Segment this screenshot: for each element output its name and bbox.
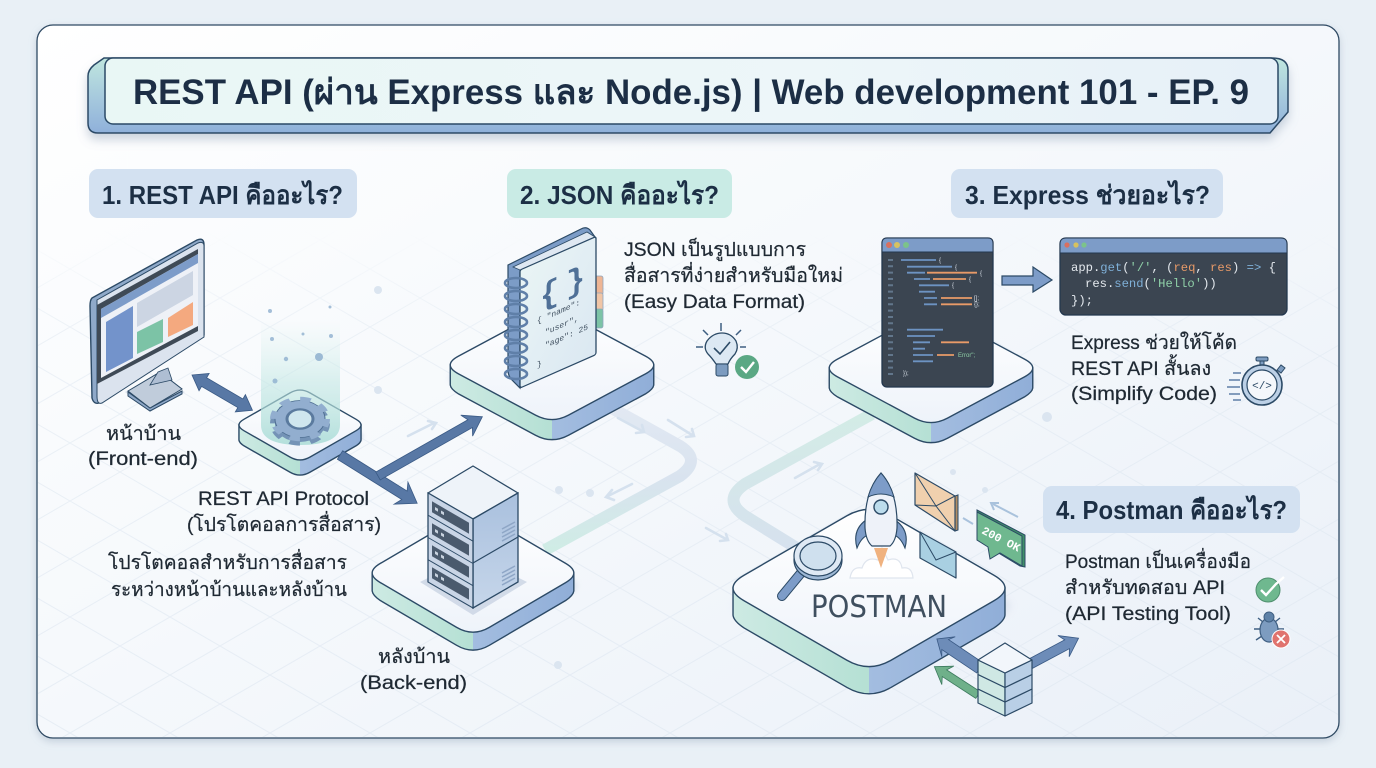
text: JSON description: (Easy Data Format) (624, 291, 805, 313)
title banner (88, 58, 1288, 133)
label: front-end (88, 423, 198, 470)
icon: JSON notebook: } (566, 261, 585, 305)
icon: server rack (420, 466, 527, 615)
arrow: protocol to back-end (333, 444, 424, 514)
heading: 3 Express: 3. Express ช่วยอะไร? (965, 179, 1210, 210)
text: Postman description: (API Testing Tool) (1065, 603, 1231, 625)
platform: JSON (450, 310, 654, 440)
code window: long code: { (969, 277, 971, 283)
icon: 200 OK speech bubble: 200 OK (979, 525, 1022, 555)
icon: bug with red x (1254, 612, 1290, 648)
label: REST API protocol (187, 488, 381, 536)
text: Postman description: Postman เป็นเครื่องมือ (1065, 548, 1251, 573)
arrow: front-end to protocol (187, 366, 257, 419)
text: Postman description (1065, 548, 1251, 625)
icon: JSON notebook: { (540, 273, 559, 318)
platform: gear (239, 390, 363, 475)
text: Express description: REST API สั้นลง (1071, 354, 1211, 380)
heading: 2 JSON: 2. JSON คืออะไร? (520, 179, 719, 210)
code window: long code: []; (974, 296, 979, 302)
faint flow arrows (408, 418, 822, 541)
code window: long code: { (955, 265, 957, 271)
platform: back-end (372, 514, 576, 650)
text: Express description: (Simplify Code) (1071, 383, 1217, 405)
icon: rocket (850, 473, 913, 578)
heading: 1 REST API: 1. REST API คืออะไร? (102, 179, 343, 210)
title text: REST API (ผ่าน Express และ Node.js) | Web development 101 - EP. 9 (133, 73, 1249, 112)
text: JSON description: สื่อสารที่ง่ายสำหรับมือใหม่ (624, 262, 843, 287)
platform: Express (829, 313, 1033, 443)
icon: JSON notebook: { "name": (537, 298, 580, 326)
text: Express description: Express ช่วยให้โค้ด (1071, 331, 1237, 354)
icon: orange envelope (915, 473, 958, 531)
heading: 4 Postman: 4. Postman คืออะไร? (1056, 494, 1287, 525)
server layers (978, 643, 1032, 716)
code window: long code: Error"; (958, 353, 975, 359)
label: REST API protocol: REST API Protocol (198, 488, 369, 510)
icon: light bulb with check (696, 323, 759, 379)
text: JSON description (624, 237, 843, 313)
text: Express description (1071, 331, 1237, 405)
code window: long code: { (939, 258, 941, 264)
heading: 2 JSON (507, 169, 732, 218)
icon: monitor (90, 239, 204, 412)
icon: JSON notebook: } (537, 359, 542, 370)
label: front-end: (Front-end) (88, 448, 198, 470)
icon: gear (273, 399, 327, 443)
small server stack with arrows (928, 628, 1084, 716)
arrow: back-end to JSON (372, 406, 488, 486)
icon: JSON notebook: "age": 25 (545, 322, 588, 351)
label: REST API protocol: (โปรโตคอลการสื่อสาร) (187, 511, 381, 536)
code window: long code: {}; (974, 302, 980, 308)
code window: short code: app.get('/', (req, res) => { (1071, 261, 1276, 275)
icon: blue envelope (920, 532, 956, 578)
code window: long code: { (980, 271, 982, 277)
code window: short code: res.send('Hello')) (1085, 277, 1217, 291)
heading: 1 REST API (89, 169, 357, 218)
icon: stopwatch (1227, 357, 1285, 405)
label: back-end (360, 646, 467, 694)
code window: short code: }); (1071, 294, 1093, 308)
label: front-end: หน้าบ้าน (106, 423, 181, 445)
icon: JSON notebook: "user", (545, 314, 579, 338)
icon: magnifying glass (782, 536, 842, 596)
icon: green check (1256, 577, 1284, 602)
heading: 4 Postman (1043, 486, 1300, 533)
code window: long code: }); (903, 371, 909, 377)
label: back-end: (Back-end) (360, 672, 467, 694)
arrow: long code to short code (1002, 267, 1052, 292)
text: protocol description (108, 549, 347, 601)
POSTMAN wordmark: POSTMAN (811, 590, 947, 625)
text: protocol description: โปรโตคอลสำหรับการสื่อสาร (108, 549, 347, 574)
flow ribbon: Express to Postman (734, 414, 872, 550)
arrow: stack to platform green (928, 657, 984, 704)
icon: stopwatch: </> (1252, 381, 1272, 393)
text: Postman description: สำหรับทดสอบ API (1065, 577, 1225, 599)
heading: 3 Express (951, 169, 1223, 218)
code window: short code (1060, 238, 1287, 315)
icon: JSON notebook (505, 228, 603, 388)
title banner front plate (105, 58, 1278, 124)
text: protocol description: ระหว่างหน้าบ้านและหลังบ้าน (111, 579, 347, 601)
title banner back plate (88, 58, 1288, 133)
arrow: small response (963, 503, 1018, 524)
flow ribbon: JSON to back-end (545, 406, 691, 550)
text: JSON description: JSON เป็นรูปแบบการ (624, 237, 806, 262)
arrow: stack to outside (1024, 628, 1084, 675)
code window: long code (882, 238, 993, 387)
icon: 200 OK speech bubble (977, 510, 1025, 567)
arrow: stack to platform blue (930, 629, 987, 678)
glow column with particles (261, 306, 340, 445)
label: back-end: หลังบ้าน (378, 646, 450, 668)
platform: Postman (733, 509, 1008, 694)
code window: long code: { (952, 283, 954, 289)
